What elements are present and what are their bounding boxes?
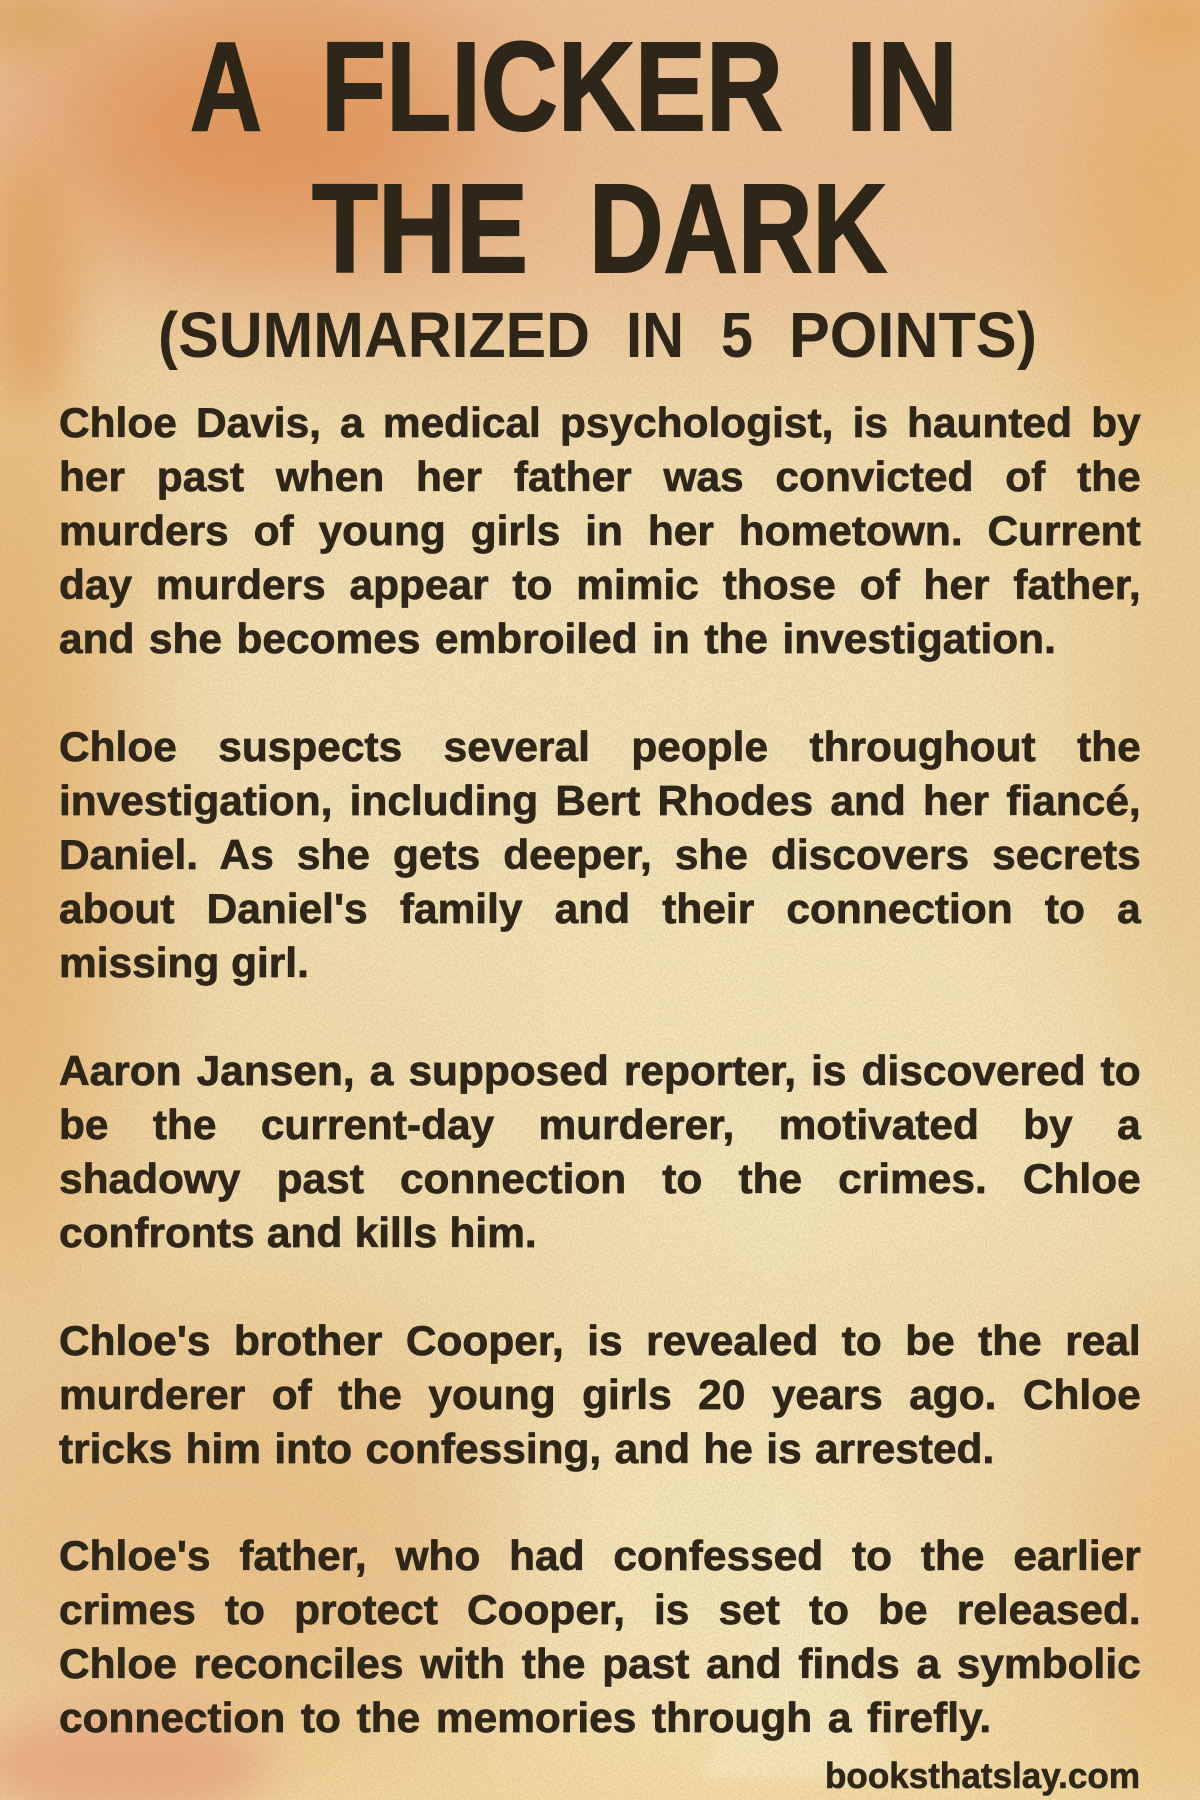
paragraph 5: father released and the firefly (59, 1532, 1141, 1741)
paragraph 1: Chloe's past and the copycat murders: day murders appear to mimic those of her father, (59, 561, 1141, 608)
paragraph 2: suspects and secrets: missing girl. (59, 939, 309, 986)
paragraph 1: Chloe's past and the copycat murders: Chloe Davis, a medical psychologist, is haunted by (59, 399, 1141, 446)
title: IN (626, 299, 684, 370)
title: DARK (589, 158, 887, 299)
paragraph 1: Chloe's past and the copycat murders: her past when her father was convicted of the (59, 453, 1141, 500)
paragraph 4: brother Cooper revealed: murderer of the young girls 20 years ago. Chloe (59, 1371, 1141, 1418)
title (158, 16, 1037, 370)
paragraph 4: brother Cooper revealed: Chloe's brother Cooper, is revealed to be the real (59, 1317, 1141, 1364)
title: THE (312, 158, 528, 299)
footer website credit: booksthatslay.com (825, 1755, 1140, 1796)
paragraph 4: brother Cooper revealed (59, 1317, 1141, 1472)
paragraph 5: father released and the firefly: Chloe's father, who had confessed to the earlier (59, 1532, 1141, 1579)
title: FLICKER (321, 16, 783, 157)
paragraph 3: Aaron Jansen revealed: confronts and kills him. (59, 1209, 537, 1256)
paragraph 4: brother Cooper revealed: tricks him into confessing, and he is arrested. (59, 1425, 994, 1472)
paragraph 3: Aaron Jansen revealed: shadowy past connection to the crimes. Chloe (59, 1155, 1141, 1202)
paragraph 5: father released and the firefly: connection to the memories through a firefly. (59, 1694, 991, 1741)
title: A (190, 16, 262, 157)
paragraph 3: Aaron Jansen revealed (59, 1047, 1142, 1256)
paragraph 2: suspects and secrets (59, 723, 1142, 986)
paragraph 1: Chloe's past and the copycat murders (59, 399, 1141, 662)
paragraph 1: Chloe's past and the copycat murders: murders of young girls in her hometown. Current (59, 507, 1141, 554)
paragraph 5: father released and the firefly: crimes to protect Cooper, is set to be released. (59, 1586, 1141, 1633)
title: 5 (721, 299, 753, 370)
title: POINTS) (789, 299, 1037, 370)
title: IN (846, 16, 958, 157)
paragraph 2: suspects and secrets: about Daniel's family and their connection to a (59, 885, 1141, 932)
title: (SUMMARIZED (158, 299, 590, 370)
paragraph 1: Chloe's past and the copycat murders: and she becomes embroiled in the investigation. (59, 615, 1056, 662)
paragraph 3: Aaron Jansen revealed: be the current-day murderer, motivated by a (59, 1101, 1141, 1148)
paragraph 2: suspects and secrets: Daniel. As she gets deeper, she discovers secrets (59, 831, 1141, 878)
paragraph 2: suspects and secrets: Chloe suspects several people throughout the (59, 723, 1141, 770)
paragraph 5: father released and the firefly: Chloe reconciles with the past and finds a symbolic (59, 1640, 1141, 1687)
paragraph 2: suspects and secrets: investigation, including Bert Rhodes and her fiancé, (59, 777, 1141, 824)
paragraph 3: Aaron Jansen revealed: Aaron Jansen, a supposed reporter, is discovered to (59, 1047, 1141, 1094)
